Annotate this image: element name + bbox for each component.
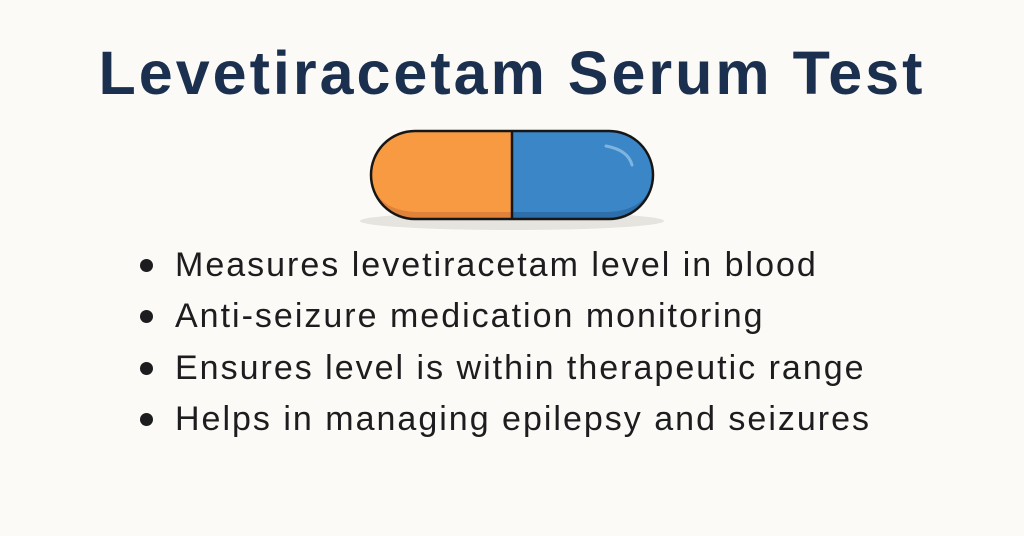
bullet 4: Helps in managing epilepsy and seizures xyxy=(175,400,871,438)
bullet 1: Measures levetiracetam level in blood xyxy=(175,246,818,284)
bullet 3: Ensures level is within therapeutic range xyxy=(175,349,866,387)
pill blue half xyxy=(512,131,653,219)
pill shadow xyxy=(360,212,664,230)
bullet list xyxy=(140,246,871,438)
pill orange half xyxy=(371,131,512,219)
icon: capsule pill xyxy=(360,130,664,230)
bullet 2: Anti-seizure medication monitoring xyxy=(175,297,765,335)
title: Levetiracetam Serum Test xyxy=(99,39,925,107)
